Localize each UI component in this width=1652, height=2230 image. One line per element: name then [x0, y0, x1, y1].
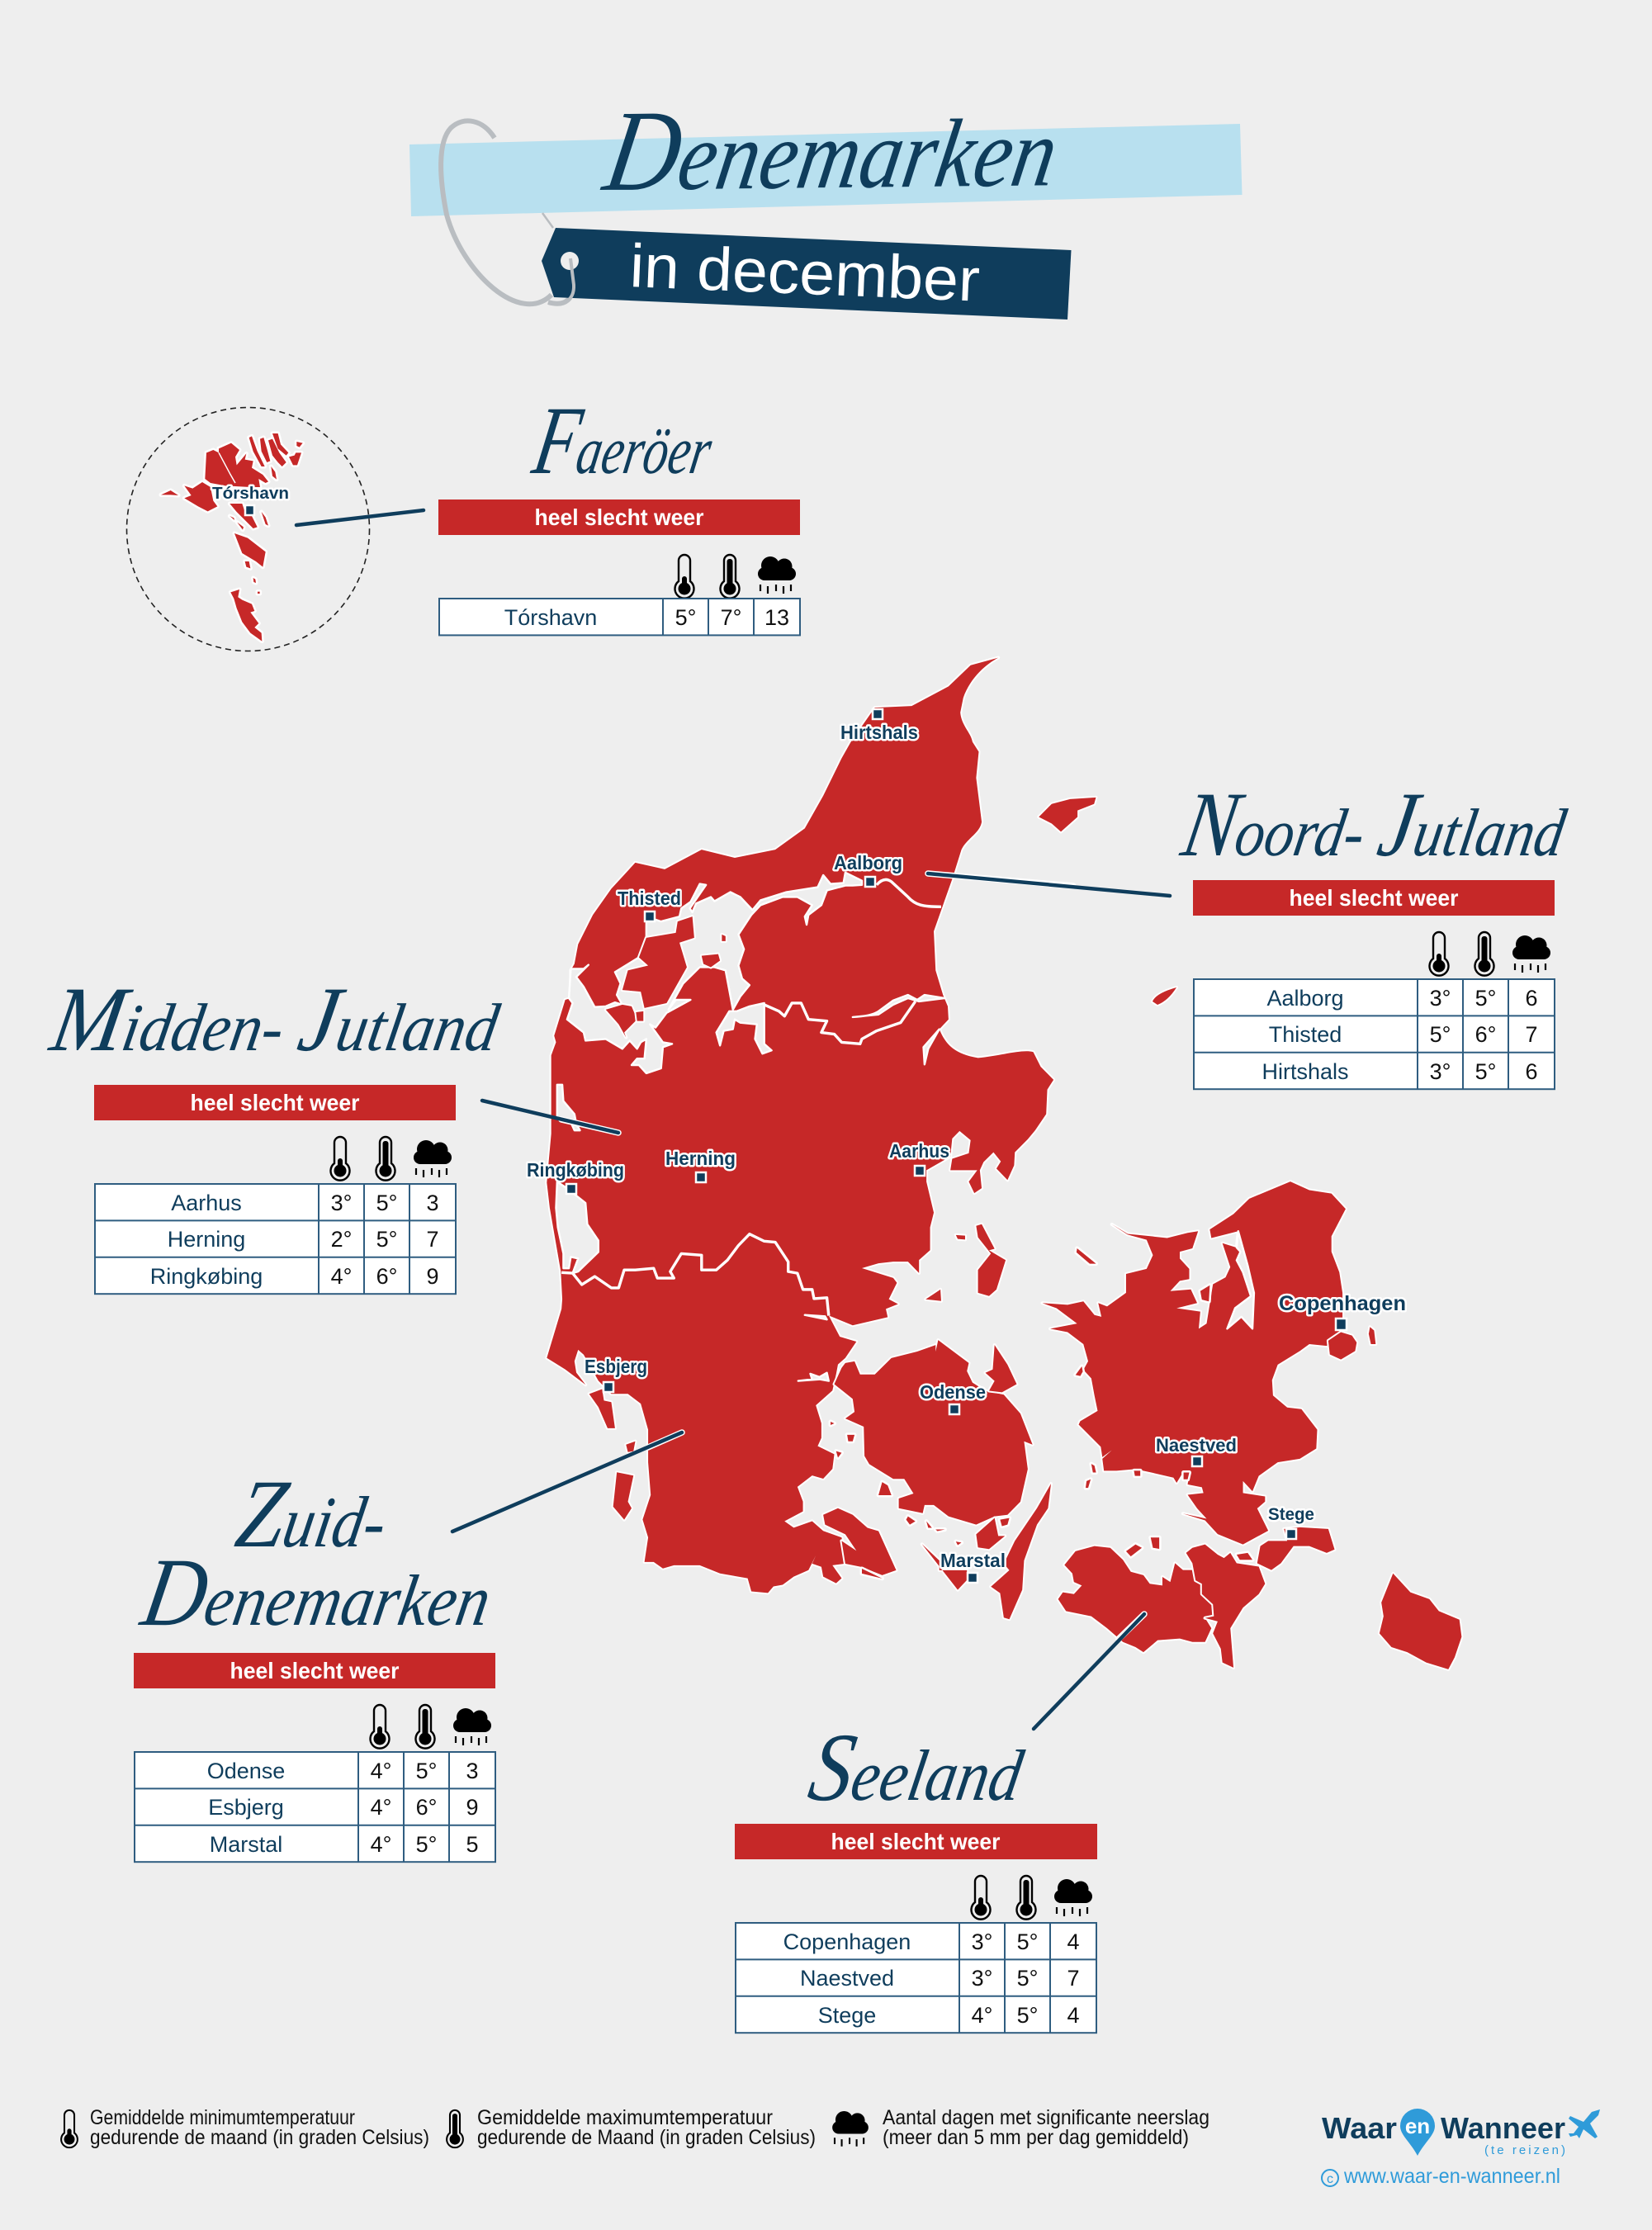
heading: Zuid-Denemarken — [134, 1460, 501, 1646]
region: Zealand and islands — [1043, 1181, 1461, 1669]
weather table: 4° — [371, 1832, 391, 1857]
city: Marstal: Marstal — [940, 1550, 1006, 1571]
border: Noord-Jutland and Midden-Jutland — [764, 1001, 916, 1044]
website: www.waar-en-wanneer.nl — [1343, 2165, 1560, 2188]
island: Rømø — [613, 1472, 633, 1520]
weather table — [439, 599, 800, 635]
title: Denemarken: Denemarken — [595, 82, 1068, 215]
island: Zealand — [1043, 1181, 1346, 1545]
island: Fanø — [589, 1389, 615, 1428]
icon: max temperature — [376, 1137, 395, 1181]
panel: Midden-Jutland — [43, 968, 509, 1294]
icon: rain — [758, 556, 796, 594]
icon: min temperature — [971, 1876, 991, 1920]
heading: Zuid-Denemarken: Zuid- — [229, 1460, 397, 1568]
legend: max temperature — [447, 2106, 816, 2149]
subtitle tag dark — [542, 228, 1072, 320]
weather table: 7 — [1525, 1022, 1538, 1047]
title block — [409, 82, 1242, 320]
city: Copenhagen: Copenhagen — [1279, 1292, 1406, 1315]
weather table: Aalborg — [1266, 986, 1344, 1011]
icon: min temperature — [370, 1705, 390, 1749]
weather table: 5° — [416, 1759, 437, 1783]
weather table: 4 — [1067, 2003, 1080, 2028]
weather table: Herning — [168, 1227, 245, 1252]
rating bar — [94, 1085, 456, 1120]
icon: min temperature — [1430, 932, 1448, 976]
arrow: Faeröer leader — [296, 510, 424, 525]
weather table: 3° — [1430, 1059, 1451, 1084]
heading: Midden-Jutland: Midden- Jutland — [43, 968, 509, 1071]
weather table — [135, 1752, 495, 1862]
title banner light blue — [409, 124, 1242, 216]
island: Mandø — [626, 1442, 635, 1452]
island: Bornholm — [1380, 1574, 1461, 1669]
weather table: 6 — [1525, 986, 1538, 1011]
icon: max temperature — [720, 555, 740, 599]
icon: min temperature — [330, 1137, 350, 1181]
icon: rain — [1512, 935, 1550, 973]
water: Lovns inlet — [717, 1003, 772, 1053]
city: Esbjerg: Esbjerg — [585, 1356, 647, 1377]
weather table: Naestved — [800, 1966, 894, 1991]
inset: Faroe Islands map — [127, 408, 370, 651]
weather table: 5 — [466, 1832, 479, 1857]
weather table: 5° — [1430, 1022, 1451, 1047]
island: small Kattegat — [1153, 987, 1176, 1005]
rating bar: heel slecht weer — [190, 1090, 360, 1115]
heading: Noord-Jutland: Noord- Jutland — [1175, 774, 1575, 876]
legend: min temperature: gedurende de maand (in graden Celsius) — [90, 2126, 429, 2149]
weather table: 3° — [972, 1966, 992, 1991]
weather table: 4° — [371, 1795, 391, 1820]
arrow: Seeland leader — [1034, 1614, 1144, 1729]
tag ring string — [441, 121, 573, 304]
logo wordmark: Wanneer: Wanneer — [1441, 2111, 1565, 2145]
water: Limfjord — [567, 873, 862, 1073]
legend: precipitation: (meer dan 5 mm per dag gemiddeld) — [883, 2126, 1189, 2149]
weather table: 7° — [721, 605, 741, 630]
weather table: 4 — [1067, 1929, 1080, 1954]
weather table: 6° — [416, 1795, 437, 1820]
weather table: Stege — [818, 2003, 876, 2028]
rating bar — [1193, 880, 1555, 916]
island: Lolland — [1058, 1546, 1214, 1652]
island: Mors — [622, 916, 694, 1008]
island: Møn — [1257, 1527, 1335, 1570]
weather table: Marstal — [210, 1832, 282, 1857]
weather table: 5° — [1017, 1966, 1038, 1991]
logo pin — [1400, 2109, 1435, 2156]
weather table: 5° — [1017, 1929, 1038, 1954]
water: Roskilde fjord — [1227, 1231, 1254, 1328]
weather table: 3° — [1430, 986, 1451, 1011]
weather table: 13 — [764, 605, 789, 630]
weather table: 5° — [376, 1191, 397, 1215]
icon: min temperature — [675, 555, 693, 599]
rating bar — [134, 1653, 495, 1688]
island: Langeland — [991, 1484, 1051, 1619]
panel: Seeland — [735, 1713, 1097, 2033]
weather table: Ringkøbing — [150, 1264, 263, 1289]
icon: rain — [1054, 1879, 1092, 1916]
city: Naestved: Naestved — [1156, 1435, 1237, 1456]
island: Saltholm — [1369, 1327, 1375, 1344]
city: Tórshavn — [212, 485, 289, 515]
weather table — [1194, 979, 1555, 1089]
heading: Faeröer: Faeröer — [526, 386, 722, 495]
water: Ringkøbing fjord — [556, 1181, 599, 1273]
panel: Zuid-Denemarken — [134, 1460, 501, 1862]
city: Esbjerg — [585, 1356, 647, 1392]
island: small Limfjord — [636, 1011, 643, 1021]
city: Copenhagen — [1279, 1292, 1406, 1330]
weather table: Odense — [207, 1759, 285, 1783]
heading: Zuid-Denemarken: Denemarken — [134, 1538, 501, 1646]
arrow: Midden-Jutland leader — [482, 1101, 618, 1133]
weather table: 4° — [331, 1264, 352, 1289]
island: Salling part — [606, 1005, 637, 1037]
weather table — [736, 1923, 1096, 2033]
city: Ringkøbing — [527, 1159, 624, 1194]
rating bar — [735, 1824, 1097, 1859]
weather table: 3° — [972, 1929, 992, 1954]
map of Denmark — [527, 658, 1461, 1669]
icon: max temperature — [416, 1705, 434, 1749]
city: Tórshavn: Tórshavn — [212, 485, 289, 503]
region: south Jutland and Funen — [556, 1181, 1051, 1619]
city: Thisted: Thisted — [618, 888, 681, 909]
dashed circle — [127, 408, 370, 651]
logo tagline: (te reizen) — [1484, 2143, 1565, 2157]
icon: rain — [453, 1708, 491, 1745]
region: Jutland mainland — [547, 658, 1096, 1593]
heading: Seeland: Seeland — [802, 1713, 1033, 1821]
panel: Noord-Jutland — [1175, 774, 1575, 1089]
weather table: 9 — [426, 1264, 439, 1289]
island: Fur — [702, 954, 720, 967]
water: Mariager fjord — [853, 995, 944, 1017]
weather table: Copenhagen — [783, 1929, 911, 1954]
city: Herning: Herning — [665, 1148, 736, 1169]
island: Tåsinge — [976, 1518, 1005, 1549]
island: Livø — [722, 935, 726, 941]
ring end over tag — [548, 258, 574, 304]
weather table: 6° — [1475, 1022, 1496, 1047]
logo: Waar en Wanneer — [1322, 2109, 1600, 2188]
island: Endelave — [925, 1290, 941, 1301]
weather table: 5° — [416, 1832, 437, 1857]
copyright mark — [1322, 2170, 1338, 2186]
weather table: 5° — [675, 605, 696, 630]
city: Aalborg — [834, 852, 902, 887]
city: Herning — [665, 1148, 736, 1182]
city: Ringkøbing: Ringkøbing — [527, 1159, 624, 1181]
weather table: 9 — [466, 1795, 479, 1820]
border: Midden-Jutland and Zuid-Denemarken — [561, 1234, 829, 1316]
city: Hirtshals — [840, 709, 918, 743]
logo word: en: en — [1405, 2114, 1430, 2138]
island: Tunø — [956, 1235, 965, 1239]
weather table: 4° — [972, 2003, 992, 2028]
city: Thisted — [618, 888, 681, 921]
legend: max temperature: Gemiddelde maximumtemperatuur — [477, 2106, 773, 2129]
weather table: 4° — [371, 1759, 391, 1783]
weather table: Hirtshals — [1261, 1059, 1349, 1084]
city: Odense — [920, 1381, 986, 1414]
city: Hirtshals: Hirtshals — [840, 722, 918, 743]
islands: small south Funen — [831, 1422, 1010, 1579]
icon: rain — [414, 1140, 452, 1177]
weather table: 7 — [1067, 1966, 1080, 1991]
icon: plane — [1569, 2109, 1600, 2138]
rating bar: heel slecht weer — [831, 1829, 1001, 1854]
city: Naestved — [1156, 1435, 1237, 1466]
weather table: Esbjerg — [208, 1795, 284, 1820]
city: Marstal — [940, 1550, 1006, 1583]
islands: small around Zealand — [1076, 1248, 1252, 1560]
weather table: 5° — [376, 1227, 397, 1252]
weather table: 2° — [331, 1227, 352, 1252]
weather table: Aarhus — [171, 1191, 242, 1215]
city: Stege: Stege — [1268, 1505, 1314, 1524]
water: small inlet Kolding — [805, 1315, 827, 1319]
island: Funen — [835, 1340, 1033, 1525]
icon: max temperature — [1474, 932, 1494, 976]
arrow: Noord-Jutland leader — [928, 874, 1170, 896]
weather table: 3 — [466, 1759, 479, 1783]
panel: Faeröer — [438, 386, 800, 635]
subtitle: in december: in december — [628, 231, 981, 315]
rating bar: heel slecht weer — [1290, 885, 1459, 911]
city: Aarhus: Aarhus — [889, 1140, 949, 1162]
weather table: 5° — [1017, 2003, 1038, 2028]
arrow: Zuid-Denemarken leader — [452, 1432, 682, 1532]
weather table — [95, 1184, 456, 1294]
island: Amager — [1328, 1333, 1356, 1360]
city: Odense: Odense — [920, 1381, 986, 1403]
legend: max temperature: gedurende de Maand (in graden Celsius) — [477, 2126, 816, 2149]
city: Aarhus — [889, 1140, 949, 1176]
icon: max temperature — [1017, 1876, 1035, 1920]
water: Randers fjord — [924, 1030, 940, 1064]
weather table: 5° — [1475, 986, 1496, 1011]
legend — [61, 2106, 1209, 2149]
rating bar — [438, 500, 800, 535]
weather table: Tórshavn — [504, 605, 597, 630]
island: Falster — [1186, 1545, 1265, 1668]
tag hole — [561, 252, 579, 270]
weather table: 3 — [426, 1191, 439, 1215]
water: small inlet Little Belt — [798, 1373, 829, 1381]
river: east Limfjord — [877, 879, 941, 907]
island: Ærø — [922, 1544, 967, 1590]
copyright mark: c — [1327, 2172, 1333, 2186]
island: Als — [823, 1508, 897, 1575]
rating bar: heel slecht weer — [230, 1658, 400, 1683]
weather table: Thisted — [1269, 1022, 1342, 1047]
weather table: 6° — [376, 1264, 397, 1289]
weather table: 5° — [1475, 1059, 1496, 1084]
legend: min temperature: Gemiddelde minimumtemperatuur — [90, 2106, 355, 2129]
weather table: 3° — [331, 1191, 352, 1215]
city: Aalborg: Aalborg — [834, 852, 902, 874]
water: Nissum fjord — [557, 1085, 580, 1130]
island: Anholt — [1039, 798, 1096, 831]
logo wordmark: Waar: Waar — [1322, 2111, 1397, 2145]
weather table: 6 — [1525, 1059, 1538, 1084]
weather table: 7 — [426, 1227, 439, 1252]
island: Samsø — [976, 1224, 1006, 1296]
islands — [161, 433, 303, 642]
legend: precipitation: Aantal dagen met significante neerslag — [883, 2106, 1209, 2129]
rating bar: heel slecht weer — [535, 504, 704, 530]
legend: precipitation — [832, 2106, 1209, 2149]
string end segment — [542, 213, 553, 228]
city: Stege — [1268, 1505, 1314, 1539]
legend: min temperature — [61, 2106, 429, 2149]
island: Hindsholm — [986, 1345, 1016, 1392]
